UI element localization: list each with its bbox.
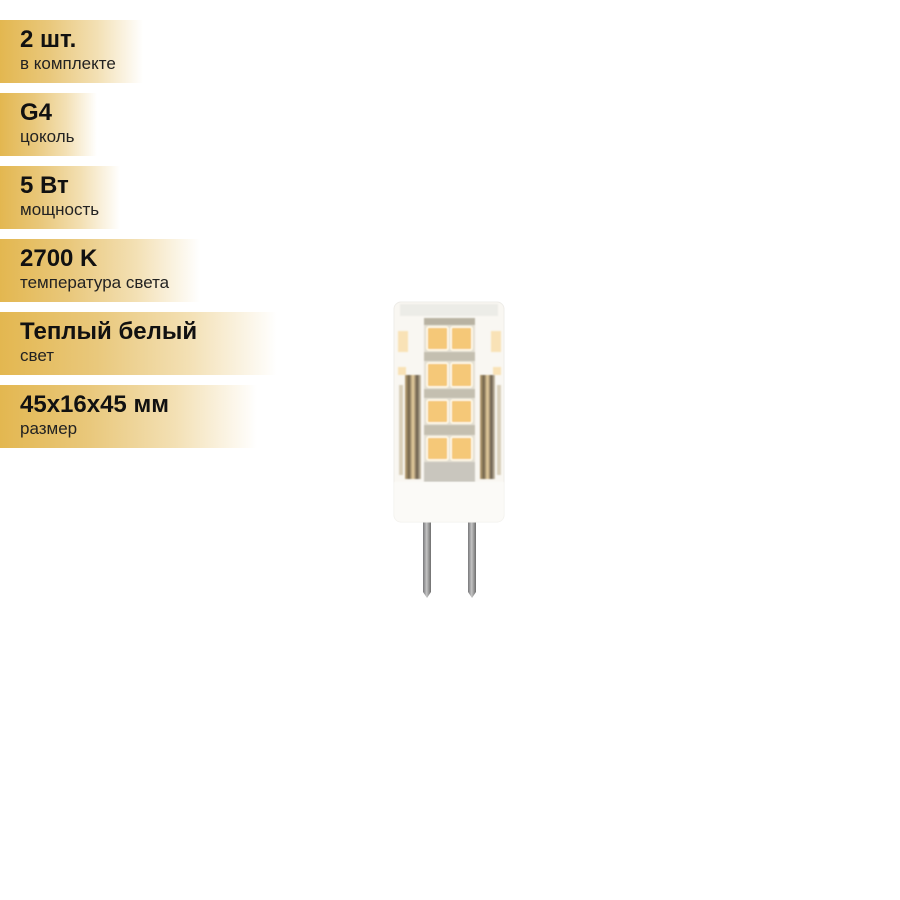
pins [423,520,476,598]
badge: power: 5 Вт [20,172,69,199]
badge: light colour [0,312,277,375]
badge: size: 45x16x45 мм [20,391,169,418]
badge: quantity [0,20,143,83]
badge: colour temperature: температура света [20,273,169,292]
internal contacts [399,375,501,479]
badge: size: размер [20,419,77,438]
badge: socket [0,93,97,156]
frosted base [394,482,504,522]
circuit board [424,318,475,482]
side LEDs [398,331,501,375]
badge: light colour: свет [20,346,54,365]
badge: colour temperature: 2700 K [20,245,97,272]
badge: light colour: Теплый белый [20,318,197,345]
badge: power: мощность [20,200,99,219]
badge: colour temperature [0,239,200,302]
badge: socket: G4 [20,99,52,126]
lamp body [394,302,504,522]
badge: quantity: в комплекте [20,54,116,73]
badge: quantity: 2 шт. [20,26,76,53]
badge: socket: цоколь [20,127,74,146]
badge: size [0,385,257,448]
badge: power [0,166,120,229]
LED chips [427,327,472,460]
